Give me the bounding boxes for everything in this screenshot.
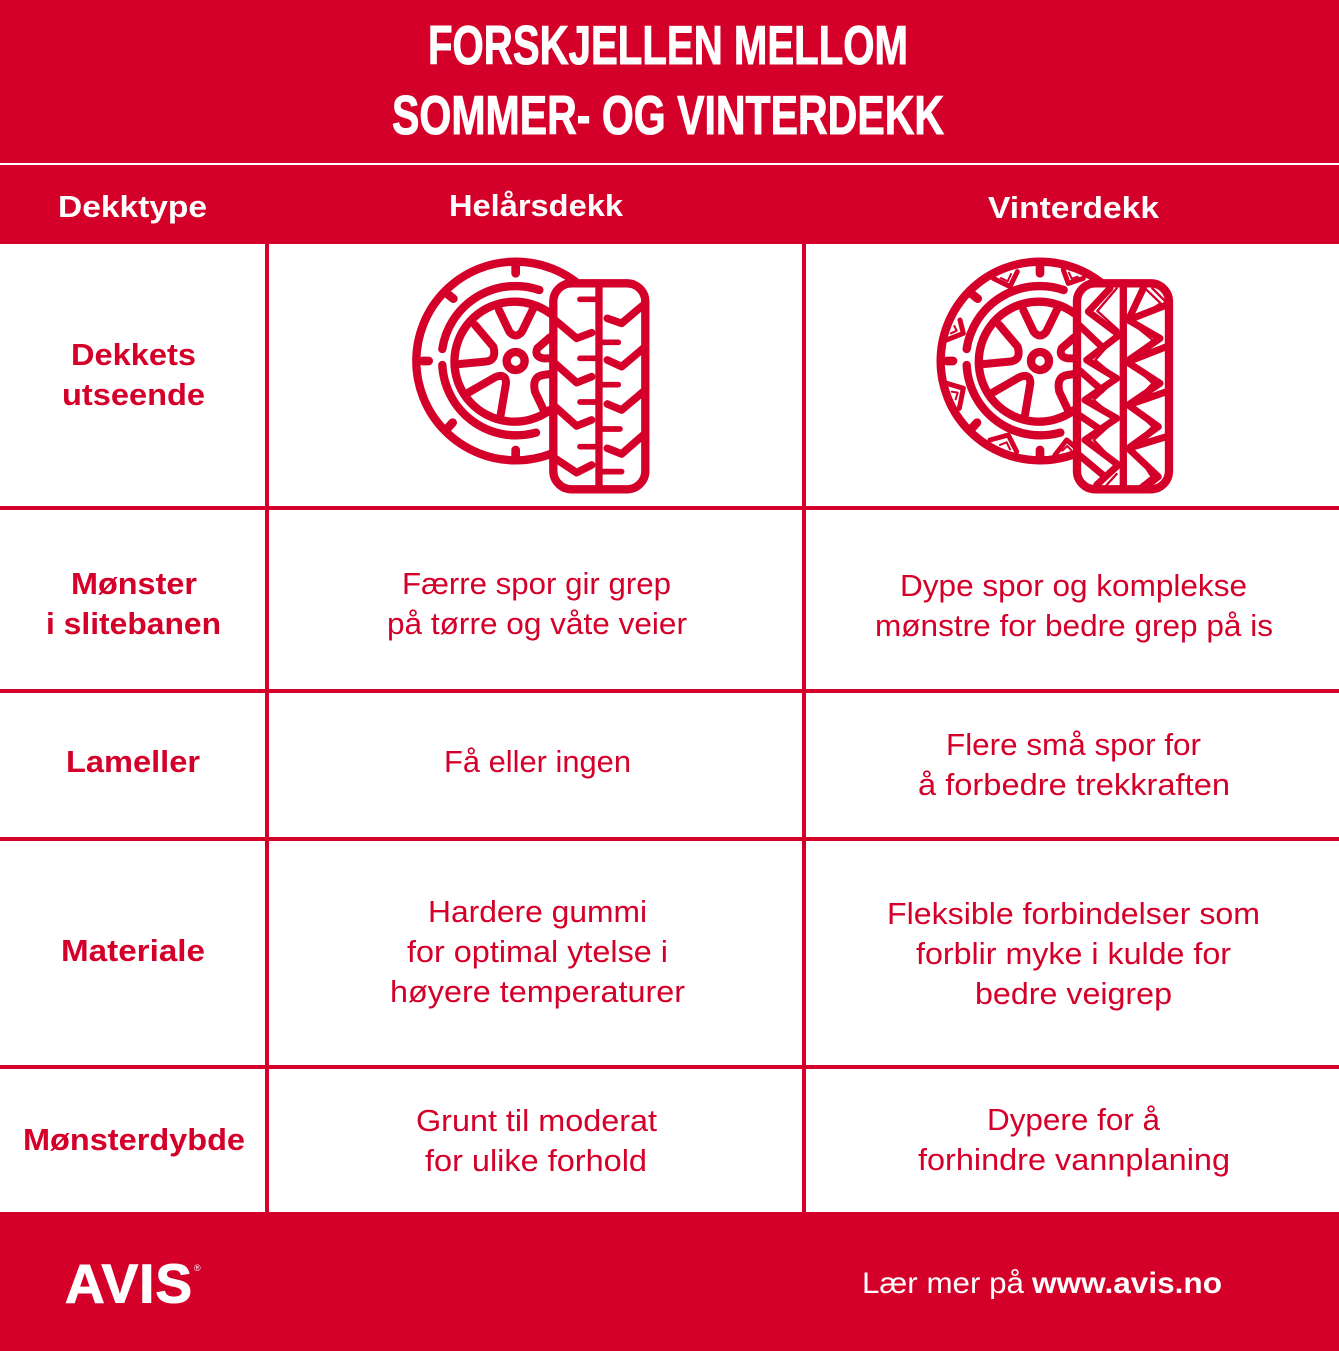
row label: Materiale: Materiale [61,933,205,968]
row label: Mønster i slitebanen: i slitebanen [46,606,221,641]
icon: winter tyre [941,262,1169,490]
text: winter material: Fleksible forbindelser som [887,896,1260,931]
text: all-season pattern: Færre spor gir grep [402,566,671,601]
text: winter pattern: Dype spor og komplekse [900,568,1247,603]
text: winter sipes: å forbedre trekkraften [918,767,1230,802]
text: winter material: forblir myke i kulde for [916,936,1231,971]
row label: Dekkets utseende [62,337,205,412]
text: winter pattern: mønstre for bedre grep på is [875,608,1273,643]
footer link text: Lær mer på [862,1267,1024,1300]
title line 2: SOMMER- OG VINTERDEKK [392,84,944,146]
text: winter sipes: Flere små spor for [946,727,1201,762]
row label: Mønster i slitebanen: Mønster [71,566,197,601]
text: all-season pattern [387,566,687,641]
text: winter material [887,896,1260,1011]
text: all-season material: for optimal ytelse i [407,934,668,969]
text: all-season pattern: på tørre og våte veier [387,606,687,641]
header: Dekktype: Dekktype [58,189,207,224]
text: all-season sipes: Få eller ingen [444,744,631,779]
table grid lines [0,244,1339,1212]
logo: AVIS: AVIS [65,1252,192,1314]
text: all-season material: Hardere gummi [428,894,647,929]
text: all-season depth [416,1103,657,1178]
row label: Mønster i slitebanen [46,566,221,641]
text: all-season material [390,894,685,1009]
text: winter depth: Dypere for å [987,1102,1161,1137]
text: winter depth: forhindre vannplaning [918,1142,1230,1177]
text: all-season depth: for ulike forhold [425,1143,647,1178]
title line 1: FORSKJELLEN MELLOM [428,14,908,76]
header: Helårsdekk: Helårsdekk [449,188,624,223]
text: winter pattern [875,568,1273,643]
text: winter material: bedre veigrep [975,976,1172,1011]
row label: Mønsterdybde: Mønsterdybde [23,1122,245,1157]
table header row [0,165,1339,244]
logo: AVIS: ® [194,1263,201,1273]
title banner [0,0,1339,163]
text: winter sipes [918,727,1230,802]
row label: Dekkets utseende: utseende [62,377,205,412]
footer link text: www.avis.no [1031,1267,1222,1300]
text: all-season material: høyere temperaturer [390,974,685,1009]
footer link text [862,1267,1222,1300]
icon: all-season tyre [416,262,645,490]
header: Vinterdekk: Vinterdekk [988,190,1160,225]
row label: Dekkets utseende: Dekkets [71,337,196,372]
row label: Lameller: Lameller [66,744,200,779]
text: all-season depth: Grunt til moderat [416,1103,657,1138]
footer band [0,1212,1339,1351]
text: winter depth [918,1102,1230,1177]
